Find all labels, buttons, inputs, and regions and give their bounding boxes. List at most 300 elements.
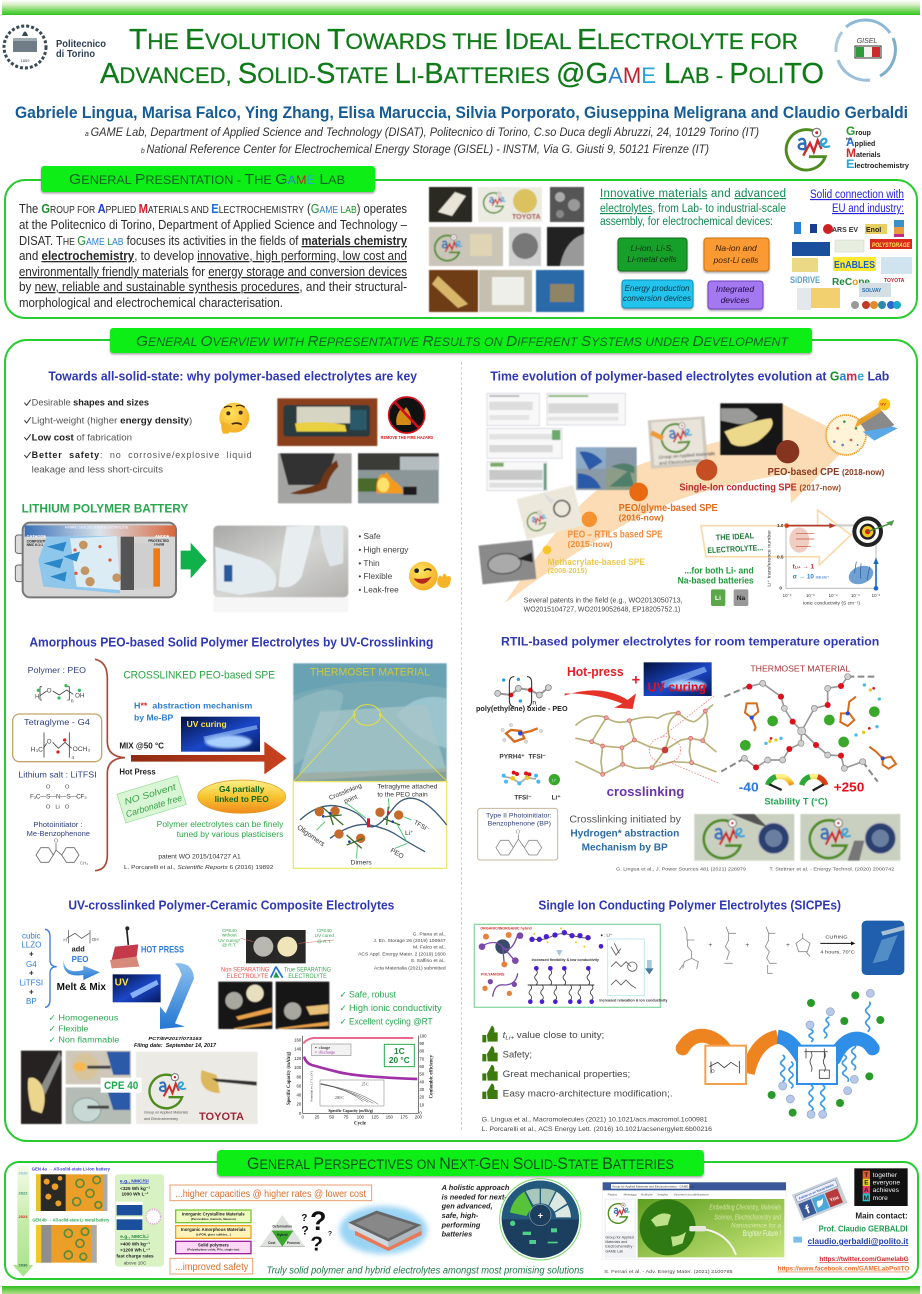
wheel: climate neutral society xyxy=(500,1179,581,1260)
logo: GAME Lab: Group xyxy=(846,124,871,138)
question marks xyxy=(301,1206,332,1256)
list: ingredients: cubic xyxy=(22,932,41,941)
text: plus signs: + xyxy=(708,942,712,949)
question marks: ? xyxy=(310,1233,323,1256)
device boxes xyxy=(618,238,769,309)
arrow: curing xyxy=(820,934,856,955)
badge: TEAM xyxy=(854,1168,908,1206)
list: performance: ✓ xyxy=(339,1003,347,1013)
text: abstraction mechanism xyxy=(134,701,252,722)
chart: cycling: Cycle xyxy=(354,1122,367,1127)
text: plus sign: + xyxy=(632,672,640,688)
labels: discs: @ R.T. xyxy=(222,942,236,947)
boxes: material classes: (LiPON, glass sulfides...) xyxy=(196,1232,231,1236)
logo: GISEL: GISEL xyxy=(857,38,877,45)
image: UV curing with red text xyxy=(644,662,712,696)
screenshot: facebook page: Group for Applied Materials and Electrochemistry - GAME Lab xyxy=(612,1185,694,1189)
chart: cycling: ▪ discharge xyxy=(315,1050,335,1055)
text: EU connection: Solid connection with xyxy=(810,189,904,201)
list: battery features: • Thin xyxy=(358,558,380,568)
patent: Filing date: September 14, 2017 xyxy=(134,1043,217,1049)
molecule: TFSI and Li xyxy=(502,771,561,801)
ingredient: tetraglyme xyxy=(13,714,102,762)
photo: burning car xyxy=(358,453,439,503)
list: SICPE advantages: Easy macro-architecture modification;. xyxy=(503,1088,673,1098)
text: abstraction mechanism: H** abstraction mechanism xyxy=(134,701,252,711)
affiliations xyxy=(85,127,759,156)
logo: Politecnico di Torino: Politecnico xyxy=(56,39,106,50)
chart: cycling: 0 xyxy=(299,1111,302,1116)
chart: transference vs conductivity: 0 xyxy=(779,586,782,591)
screenshot: facebook page: Group for Applied xyxy=(605,1235,634,1239)
text: patents: WO2015104727, WO2019052648, EP18205752.1) xyxy=(524,605,680,614)
ingredient: Me-benzophenone: CH₃ xyxy=(80,860,88,865)
section heading: Towards all-solid-state: why polymer-based electrolytes are key xyxy=(48,370,417,384)
callout: G4 partially linked: G4 partially xyxy=(219,784,265,794)
list: SICPE advantages xyxy=(482,1026,673,1099)
chart: cycling: 200 C xyxy=(335,1096,344,1100)
photo: game logo sample xyxy=(648,416,716,469)
partner logos: SOLVAY xyxy=(862,288,882,294)
bracket xyxy=(95,659,125,871)
step: add PEO and melt: add xyxy=(72,944,85,953)
device boxes: Energy production xyxy=(625,284,690,293)
intro paragraph: The GROUP FOR APPLIED MATERIALS AND ELECTROCHEMISTRY (GAME LAB) operates xyxy=(19,201,407,216)
icons: Li and Na tiles: Li xyxy=(715,595,721,602)
arrow: the ideal electrolyte xyxy=(701,510,851,565)
benefit list: Desirable shapes and sizes xyxy=(32,398,149,408)
callout: higher capacities: ...higher capacities @ higher rates @ lower cost xyxy=(175,1189,366,1200)
text: holistic approach: batteries xyxy=(442,1230,472,1239)
chart: cycling: 30 xyxy=(419,1087,425,1092)
references xyxy=(124,854,273,871)
list: properties: Homogeneous xyxy=(58,1013,118,1023)
references xyxy=(482,1117,712,1133)
labels: separating electrolyte: Non SEPARATING xyxy=(221,966,269,973)
callout: higher capacities xyxy=(170,1185,372,1201)
chart: cycling: 25 xyxy=(315,1114,320,1119)
diagram: block copolymer xyxy=(683,989,884,1118)
milestone labels: (2008-2015) xyxy=(548,568,587,575)
photo grid: TOYOTA xyxy=(512,214,541,221)
labels: separating electrolyte xyxy=(221,966,331,980)
ingredient: LiTFSI xyxy=(18,770,97,810)
ingredient: tetraglyme: OCH₃ xyxy=(73,746,90,753)
question marks: ? xyxy=(328,1231,332,1238)
logo: GAME Lab: Electrochemistry xyxy=(846,157,909,171)
ingredient: LiTFSI: Li xyxy=(55,804,60,810)
image: UV curing xyxy=(181,717,260,752)
icons: social xyxy=(792,1177,847,1221)
heading: thermoset material: THERMOSET MATERIAL xyxy=(750,663,851,673)
intro paragraph: morphological and electrochemical characterisation. xyxy=(19,295,283,310)
badge: TEAM: more xyxy=(873,1195,888,1202)
milestone labels: Single-Ion conducting SPE (2017-now) xyxy=(679,482,841,493)
title: ADVANCED, SOLID-STATE LI-BATTERIES @GAME LAB - POLITO xyxy=(100,58,824,90)
text: plasticisers: tuned by various plasticisers xyxy=(177,830,283,839)
chart: cycling: Specific Capacity (mAh/g) xyxy=(287,1051,292,1105)
chart: cycling: 70 xyxy=(419,1056,425,1061)
subheading: lithium polymer battery: LITHIUM POLYMER BATTERY xyxy=(22,501,188,515)
chart: cycling: 40 xyxy=(297,1092,302,1097)
step: add PEO and melt: OH xyxy=(92,937,99,942)
list: ingredients: + xyxy=(29,969,34,978)
contact: Prof. Claudio GERBALDI xyxy=(819,1224,908,1234)
chart: transference vs conductivity: 10⁻⁴ xyxy=(829,593,838,598)
molecule: PEO: poly(ethylene) oxide - PEO xyxy=(476,706,568,713)
contact: Main contact: xyxy=(855,1210,908,1220)
badge: TEAM: everyone xyxy=(873,1180,900,1187)
screenshot: facebook page: Embedding Chemistry, Materials xyxy=(709,1202,781,1211)
intro paragraph: environmentally friendly materials for energy storage and conversion devices xyxy=(19,264,407,279)
text: crosslinking mechanism: Crosslinking initiated by xyxy=(569,814,681,825)
photos: separation test xyxy=(218,982,329,1029)
text: patents xyxy=(524,595,683,614)
panel: general perspectives xyxy=(5,1150,918,1279)
ingredient: PEO: O xyxy=(47,687,52,694)
box: energy targets: >400 Wh kg⁻¹ xyxy=(120,1241,150,1246)
labels: discs: UV curing* xyxy=(218,938,241,943)
logo: GAME in photo: and Electrochemistry xyxy=(144,1117,178,1121)
section heading: Time evolution of polymer-based electrolytes evolution at Game Lab xyxy=(490,370,890,384)
arrow: curing: 4 hours, 70°C xyxy=(820,950,856,955)
device boxes: Li-ion, Li-S, xyxy=(630,243,674,253)
illustration: UV battery xyxy=(826,398,898,455)
badge: TEAM: together xyxy=(873,1172,898,1179)
image: UV curing with red text: UV curing xyxy=(648,680,706,695)
screenshot: facebook page: Notifiche xyxy=(641,1192,653,1196)
text: plasticisers xyxy=(157,820,283,839)
diagram: battery cross-section: Li metal xyxy=(152,542,164,546)
gauge: stability temperature: -40 xyxy=(739,781,759,795)
diagram: battery cross-section: CATHODE xyxy=(27,533,46,538)
photo: swollen phone battery xyxy=(277,398,377,446)
diagram: triangle: Deformation xyxy=(273,1224,292,1228)
chart: transference vs conductivity: 10⁻³ xyxy=(851,593,860,598)
chart: transference vs conductivity xyxy=(766,523,881,605)
panel: general presentation xyxy=(5,166,917,318)
chart: cycling: 125 xyxy=(371,1114,379,1119)
affiliations: a GAME Lab, Department of Applied Science and Technology (DISAT), Politecnico di Torino, C.so Duca degli Abruzzi, 24, 10129 Torino (IT) xyxy=(85,127,759,139)
diagram: battery cross-section: HYBRID SEALED SOLID ELECTROLYTE xyxy=(65,526,129,530)
boxes: material classes xyxy=(176,1210,251,1254)
chart: cycling xyxy=(287,1033,435,1127)
list: ingredients: BP xyxy=(26,997,37,1006)
ingredient: LiTFSI: O xyxy=(65,804,70,810)
chart: cycling: 100 xyxy=(294,1065,302,1070)
chart: cycling: Potential vs Li⁺/Li (V) xyxy=(310,1071,314,1102)
arrow: the ideal electrolyte: THE IDEAL xyxy=(716,531,754,542)
intro paragraph: and electrochemistry, to develop innovative, high performing, low cost and xyxy=(19,248,407,263)
labels: separating electrolyte: ELECTROLYTE xyxy=(227,973,269,980)
chart: cycling: 75 xyxy=(344,1114,349,1119)
box: energy targets: above 10C xyxy=(124,1260,147,1265)
contact: claudio.gerbaldi@polito.it xyxy=(808,1236,909,1246)
title: THE EVOLUTION TOWARDS THE IDEAL ELECTROLYTE FOR xyxy=(129,24,798,56)
text: holistic approach: gen advanced, xyxy=(441,1202,493,1211)
diagram: battery cross-section: NMC 6:1:1 xyxy=(27,543,43,547)
partner logos xyxy=(790,220,912,310)
diagram: block copolymer: O xyxy=(711,1068,715,1073)
chart: cycling: 200 xyxy=(415,1114,423,1119)
labels: discs: CPE40 xyxy=(222,928,237,933)
references xyxy=(358,931,446,971)
section heading: Single Ion Conducting Polymer Electrolytes (SICPEs) xyxy=(538,899,841,913)
text: mix and hot press: MIX @50 °C xyxy=(119,742,164,751)
chart: cycling: 100 xyxy=(419,1033,427,1038)
list: battery features xyxy=(358,531,409,594)
molecule: TFSI and Li: Li⁺ xyxy=(552,794,561,801)
list: ingredients xyxy=(20,932,43,1006)
text: both Li and Na: ...for both Li- and xyxy=(684,566,754,576)
timeline arrow xyxy=(13,1166,33,1277)
list: performance xyxy=(339,990,442,1027)
boxes: material classes: Inorganic Amorphous Materials xyxy=(181,1227,246,1232)
logo: GAME Lab: Applied xyxy=(846,135,875,149)
screenshot: facebook page: Strumenti di pubblicazione xyxy=(674,1192,709,1196)
device boxes: conversion devices xyxy=(623,294,691,303)
diagram: battery cross-section: ANODE xyxy=(155,533,170,538)
list: performance: Safe, robust xyxy=(349,990,396,1000)
list: SICPE advantages: Safety; xyxy=(503,1049,532,1059)
icon: target xyxy=(852,516,894,547)
list: properties: ✓ xyxy=(49,1024,56,1034)
partner logos: SiDRIVE xyxy=(790,275,820,285)
section: why polymer-based electrolytes xyxy=(15,370,451,612)
labels: separating electrolyte: ELECTROLYTE xyxy=(288,973,327,980)
ingredient: Me-benzophenone: O xyxy=(54,839,58,845)
screenshot: facebook page: Science, Electrochemistry and xyxy=(714,1212,782,1221)
logo: GAME in photo xyxy=(144,1074,244,1123)
diagram: crosslinked structure: TFSI⁻ xyxy=(412,819,431,834)
label: CPE 40: CPE 40 xyxy=(104,1080,138,1092)
chart: cycling: Specific Capacity (mAh/g) xyxy=(328,1108,374,1113)
icon: fire hazard sign: REMOVE THE FIRE HAZARD xyxy=(381,435,433,440)
box: photoinitiator: Type II Photoinitiator: xyxy=(486,812,552,819)
contact: https://www.facebook.com/GAMELabPoliTO xyxy=(778,1267,910,1273)
boxes: material classes: (Perovskites, Garnets, Nasicon) xyxy=(191,1217,236,1221)
list: SICPE advantages: Great mechanical properties; xyxy=(503,1069,630,1079)
GEN 4a battery xyxy=(32,1167,111,1211)
arrow: the ideal electrolyte: ELECTROLYTE... xyxy=(707,543,763,555)
list: ingredients: G4 xyxy=(26,960,37,969)
heading tab: perspectives: GENERAL PERSPECTIVES ON NEXT-GEN SOLID-STATE BATTERIES xyxy=(247,1154,674,1173)
image: UV lamp: UV xyxy=(115,977,129,988)
photo: flexible pouch cell xyxy=(213,526,348,612)
text: EU connection: EU and industry: xyxy=(832,203,904,215)
bottom gradient bar xyxy=(2,1286,920,1294)
device boxes: Na-ion and xyxy=(715,243,757,253)
list: ingredients: LLZO xyxy=(21,940,41,949)
icon: thinking emoji xyxy=(219,403,249,434)
text: abstraction mechanism: by Me-BP xyxy=(134,712,174,722)
diagram: crosslinked structure xyxy=(293,782,447,868)
references: L. Porcarelli et al., ACS Energy Lett. (2016) 10.1021/acsenergylett.6b00216 xyxy=(482,1126,712,1133)
icon: heat press: HOT PRESS xyxy=(141,944,184,954)
box: polymer architectures: POLYANIONS xyxy=(481,973,505,977)
diagram: crosslinked structure: Tetraglyme attached xyxy=(377,784,438,791)
list: properties: Flexible xyxy=(58,1024,89,1034)
benefit list xyxy=(24,398,252,474)
box: polymer architectures: Increased relaxation & ion conductivity xyxy=(599,998,668,1002)
badge: TEAM: E xyxy=(864,1180,868,1187)
list: SICPE advantages: t xyxy=(503,1030,506,1040)
references: S. Saffirio et al., xyxy=(411,958,446,964)
milestone labels xyxy=(548,467,884,575)
diagram: crosslink network xyxy=(576,695,719,799)
chart: transference vs conductivity: 0.5 xyxy=(777,554,784,559)
screenshot: facebook page: Materials and xyxy=(605,1240,627,1244)
molecule: TFSI and Li: TFSI⁻ xyxy=(514,794,531,801)
molecule: TFSI and Li: Li⁺ xyxy=(552,778,557,782)
chart: transference vs conductivity: Li⁺ transference number xyxy=(766,529,771,587)
GEN 4b battery xyxy=(32,1217,110,1263)
question marks: ? xyxy=(301,1213,307,1224)
intro paragraph: DISAT. THE GAME LAB focuses its activities in the fields of materials chemistry xyxy=(19,233,408,248)
partner logos: ARS EV xyxy=(832,227,858,234)
list: battery features: • Leak-free xyxy=(358,584,399,594)
contact: https://twitter.com/GamelabG xyxy=(819,1257,909,1263)
text: both Li and Na: Na-based batteries xyxy=(678,576,754,586)
illustration: UV battery: UV xyxy=(880,402,886,407)
partner logos: TOYOTA xyxy=(884,278,905,284)
diagram: crosslinked structure: Oligomers xyxy=(296,824,326,849)
list: battery features: • High energy xyxy=(358,545,409,555)
photo: thermoset film xyxy=(293,663,447,782)
icons: social: f xyxy=(803,1202,813,1217)
section: RTIL-based electrolytes xyxy=(476,635,900,872)
device boxes: post-Li cells xyxy=(713,255,759,265)
ingredient: LiTFSI: O xyxy=(46,804,51,810)
icon: winking emoji xyxy=(409,562,451,590)
milestone labels: PEO-based CPE (2018-now) xyxy=(768,467,884,478)
chart: cycling: 50 xyxy=(419,1072,425,1077)
box: polymer architectures: Increased flexibility & low conductivity xyxy=(532,958,600,962)
ingredient: LiTFSI: F₃C—S—N—S—CF₃ xyxy=(30,794,87,801)
diagram: crosslinked structure: Crosslinking xyxy=(328,782,363,802)
text: holistic approach: is needed for next- xyxy=(442,1192,507,1201)
logo: GAME in photo: Group on Applied Materials xyxy=(144,1110,188,1114)
arrow: big blue xyxy=(160,963,194,1029)
chart: transference vs conductivity: 10⁻⁵ xyxy=(806,593,815,598)
bracket: blue xyxy=(45,929,57,1007)
arrow: green xyxy=(181,543,207,578)
chart: cycling: 25 C xyxy=(362,1083,369,1087)
labels: discs: CPE40 xyxy=(317,928,332,933)
chart: cycling: 1C xyxy=(394,1046,405,1056)
list: properties xyxy=(49,1013,120,1044)
section heading: RTIL-based polymer electrolytes for room temperature operation xyxy=(501,635,879,649)
papers xyxy=(487,393,625,491)
heading tab: general overview: GENERAL OVERVIEW WITH REPRESENTATIVE RESULTS ON DIFFERENT SYSTEMS UNDER DEVELOPMENT xyxy=(136,333,790,350)
chart: cycling: 120 xyxy=(294,1056,302,1061)
screenshot: facebook page: Messaggi xyxy=(624,1192,637,1196)
list: battery features: • Safe xyxy=(358,531,381,541)
diagram: crosslink network: crosslinking xyxy=(607,785,684,799)
timeline arrow: 2024 xyxy=(19,1214,28,1219)
timeline arrow: 2030 xyxy=(19,1262,28,1267)
screenshot: facebook page: GAME Lab xyxy=(605,1249,623,1253)
box: photoinitiator: O xyxy=(516,829,520,835)
chart: cycling: 150 xyxy=(386,1114,394,1119)
chart: transference vs conductivity: 10⁻⁶ xyxy=(783,593,792,598)
text: patents: Several patents in the field (e.g., WO2013050713, xyxy=(524,595,683,604)
ingredient: tetraglyme: H₃C xyxy=(31,747,43,754)
diagram: triangle: Hybrid xyxy=(277,1233,288,1237)
callout: improved safety xyxy=(170,1258,253,1274)
molecule: PYRH4: PYRH4⁺ TFSI⁻ xyxy=(499,753,546,760)
list: properties: Non flammable xyxy=(58,1034,120,1044)
badge: TEAM: T xyxy=(864,1172,868,1179)
patent xyxy=(134,1036,217,1049)
ingredient: PEO: n xyxy=(71,698,74,704)
gauge: stability temperature: Stability T (°C) xyxy=(764,796,828,806)
chart: cycling: 20 xyxy=(297,1102,302,1107)
partner logos: EnoI xyxy=(866,227,881,234)
step: add PEO and melt: H xyxy=(63,938,67,943)
heading tab: general presentation: GENERAL PRESENTATION - THE GAME LAB xyxy=(69,171,345,188)
ingredient: PEO: OH xyxy=(75,693,85,700)
section: time evolution xyxy=(478,370,898,614)
diagram: molecular structure xyxy=(721,674,896,782)
milestone dots xyxy=(543,440,799,554)
tagline: Truly solid polymer and hybrid electrolytes amongst most promising solutions xyxy=(267,1265,584,1276)
ingredient: LiTFSI: O xyxy=(65,784,70,790)
photo: thermoset film: THERMOSET MATERIAL xyxy=(310,667,430,679)
text: innovative materials: Innovative materials and advanced xyxy=(600,188,786,200)
chart: transference vs conductivity: 1.0 xyxy=(777,523,784,528)
photo: burnt laptop xyxy=(278,453,352,503)
box: energy targets: 1000 Wh L⁻¹ xyxy=(121,1192,149,1197)
text: crosslinking mechanism: Hydrogen* abstraction xyxy=(570,829,679,840)
logo: GAME Lab: Materials xyxy=(846,146,881,160)
device boxes: devices xyxy=(721,295,750,305)
photo: blue glove xyxy=(576,447,637,490)
boxes: material classes: Solid polymers xyxy=(198,1242,229,1247)
milestone labels: (2016-now) xyxy=(619,512,664,522)
heading tab: general overview xyxy=(110,328,812,353)
ingredient: PEO: H xyxy=(35,693,40,700)
logo: GAME Lab xyxy=(786,124,909,171)
milestone labels: Methacrylate-based SPE xyxy=(548,557,645,567)
chart: cycling: 60 xyxy=(419,1064,425,1069)
diagram: battery cross-section: PROTECTED xyxy=(148,539,169,543)
screenshot: facebook page: Brighter Future ! xyxy=(743,1229,782,1238)
subheading: crosslinked SPE: CROSSLINKED PEO-based SPE xyxy=(123,670,275,682)
diagram: triangle xyxy=(260,1215,305,1247)
box: polymer architectures xyxy=(474,924,668,1007)
screenshot: facebook page: Electrochemistry - xyxy=(605,1245,635,1249)
box: energy targets xyxy=(115,1174,164,1267)
screenshot: facebook page: Nanoscience for a xyxy=(731,1223,782,1229)
illustration: solid-state battery xyxy=(339,1206,427,1254)
box: energy targets: e.g., NMC/Si xyxy=(120,1178,149,1184)
boxes: material classes: Inorganic Crystalline Materials xyxy=(182,1212,245,1217)
labels: discs: without xyxy=(222,933,237,938)
text: crosslinking mechanism xyxy=(569,814,681,854)
timeline arrow: 2020 xyxy=(19,1170,28,1175)
labels: discs: UV cured xyxy=(315,933,334,938)
badge: TEAM: M xyxy=(864,1195,869,1202)
list: properties: ✓ xyxy=(49,1034,56,1044)
panel: general overview xyxy=(5,328,917,1141)
image: UV lamp xyxy=(113,974,161,1002)
diagram: crosslinked structure: to the PEO chain xyxy=(377,792,428,799)
ingredient: tetraglyme: Tetraglyme - G4 xyxy=(24,717,90,727)
box: energy targets: fast charge rates xyxy=(116,1254,154,1259)
ingredient: Me-benzophenone: Photoinitiator : xyxy=(33,820,83,829)
labels: discs: @ R.T. xyxy=(317,939,331,944)
